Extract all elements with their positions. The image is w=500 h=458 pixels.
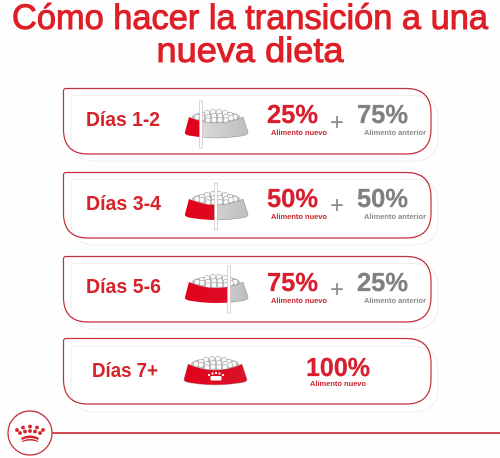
new food 75% [267, 267, 327, 305]
icon: bowl 25% [185, 101, 248, 148]
new food 100%: Alimento nuevo [310, 381, 366, 388]
panel: días 7+ [64, 338, 438, 412]
new food 25%: Alimento nuevo [271, 130, 327, 137]
day label: Días 1-2 [86, 109, 160, 131]
panel: días 1-2 [64, 88, 438, 161]
old food 50%: Alimento anterior [364, 214, 426, 221]
panel: días 3-4 [64, 172, 438, 245]
plus: + [330, 192, 344, 219]
new food 100%: 100% [306, 352, 370, 382]
plus: + [330, 276, 344, 303]
day label: Días 7+ [92, 360, 158, 382]
new food 25%: 25% [267, 99, 318, 129]
old food 50% [357, 183, 426, 221]
new food 50%: Alimento nuevo [271, 214, 327, 221]
old food 25%: Alimento anterior [364, 298, 426, 305]
title [12, 0, 489, 70]
panel: días 5-6 [64, 256, 438, 329]
new food 25% [267, 99, 327, 137]
new food 75%: 75% [267, 267, 318, 297]
icon: bowl 75% [185, 266, 248, 313]
plus: + [330, 109, 344, 136]
footer line [52, 432, 500, 434]
old food 25%: 25% [357, 267, 408, 297]
old food 75% [357, 99, 426, 137]
icon: bowl 100% [184, 356, 247, 385]
icon: bowl 50% [185, 183, 248, 230]
day label: Días 5-6 [86, 276, 161, 298]
old food 25% [357, 267, 426, 305]
footer crown logo [8, 411, 52, 455]
old food 75%: Alimento anterior [364, 130, 426, 137]
old food 75%: 75% [357, 99, 408, 129]
new food 50%: 50% [267, 183, 318, 213]
old food 50%: 50% [357, 183, 408, 213]
title: nueva dieta [156, 31, 344, 70]
new food 75%: Alimento nuevo [271, 298, 327, 305]
new food 50% [267, 183, 327, 221]
day label: Días 3-4 [86, 193, 162, 215]
